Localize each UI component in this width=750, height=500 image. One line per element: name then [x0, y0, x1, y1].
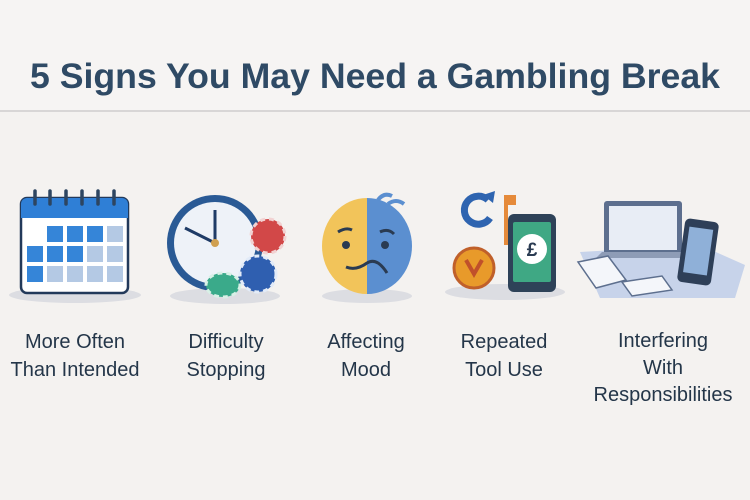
icon: mood face [322, 195, 412, 303]
labels [10, 330, 732, 406]
label: responsibilities: Interfering [618, 330, 708, 352]
label: more often: Than Intended [10, 359, 140, 381]
title: 5 Signs You May Need a Gambling Break [30, 57, 721, 96]
label: mood: Mood [341, 359, 391, 381]
icon: repeated tool: £ [527, 240, 538, 261]
icon: calendar [9, 191, 141, 303]
icon: clock with chips [167, 195, 285, 304]
label: difficulty: Stopping [187, 359, 265, 381]
label: mood: Affecting [327, 331, 405, 353]
icon: laptop and phone [578, 201, 745, 298]
label: responsibilities: With [643, 357, 683, 379]
icon: repeated tool [445, 191, 565, 300]
label: more often: More Often [25, 331, 125, 353]
label: tool use: Repeated [461, 331, 547, 353]
label: tool use: Tool Use [465, 359, 543, 381]
label: difficulty: Difficulty [188, 331, 264, 353]
label: responsibilities: Responsibilities [594, 384, 732, 406]
